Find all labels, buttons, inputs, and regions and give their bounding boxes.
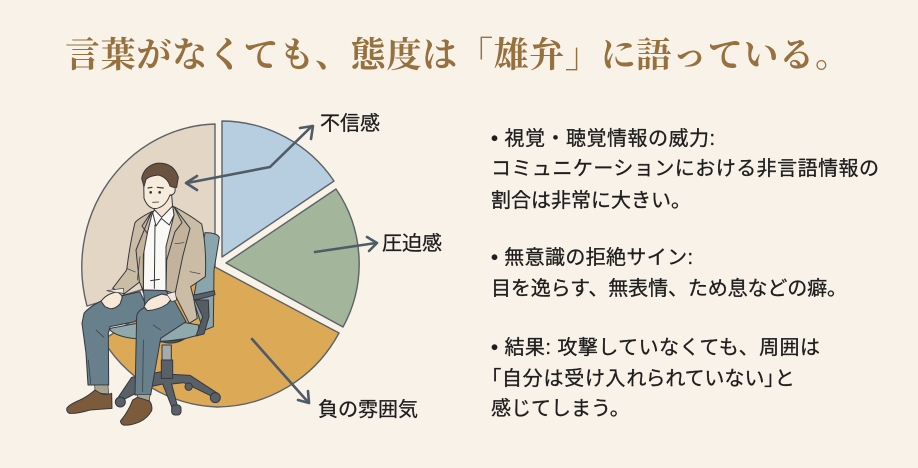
title: 言葉がなくても、態度は「雄弁」に語っている。 [65,36,850,75]
illustration: seated man [67,163,220,425]
text block: power of visual and auditory information [491,127,879,212]
text block: result: • 結果: 攻撃していなくても、周囲は [491,336,820,359]
shoes [67,390,152,425]
text block: power of visual and auditory information: • 視覚・聴覚情報の威力: [491,127,715,150]
arrow: negative atmosphere [252,339,309,403]
slice: blue, distrust [222,121,334,257]
text block: result: 感じてしまう。 [491,397,630,420]
label: negative atmosphere: 負の雰囲気 [318,398,418,421]
shirt placket line [151,225,159,288]
text block: unconscious rejection signs: • 無意識の拒絶サイン: [491,246,693,269]
pie chart [82,121,359,407]
shirt [143,206,174,291]
cuffs [107,288,177,302]
text block: power of visual and auditory information: 割合は非常に大きい。 [491,189,691,212]
slice: green, pressure [226,189,359,327]
text block: result: 「自分は受け入れられていない」と [491,367,793,390]
office chair [110,233,220,415]
label: distrust: 不信感 [320,112,380,135]
text block: unconscious rejection signs [491,246,847,300]
label: pressure: 圧迫感 [382,232,442,255]
trousers [82,290,186,395]
jacket [113,207,206,323]
text block: result [491,336,820,420]
text block: unconscious rejection signs: 目を逸らす、無表情、ため息などの癖。 [491,277,847,300]
socks [95,385,150,402]
jacket lapels and details [127,207,200,294]
hands [101,292,173,311]
slice: beige [82,124,215,306]
slice: orange, negative atmosphere [103,267,339,407]
arrow: pressure [315,237,377,252]
arrow: distrust [186,126,313,190]
text block: power of visual and auditory information: コミュニケーションにおける非言語情報の [491,157,879,180]
neck and head [142,163,178,226]
trouser creases [88,325,161,392]
